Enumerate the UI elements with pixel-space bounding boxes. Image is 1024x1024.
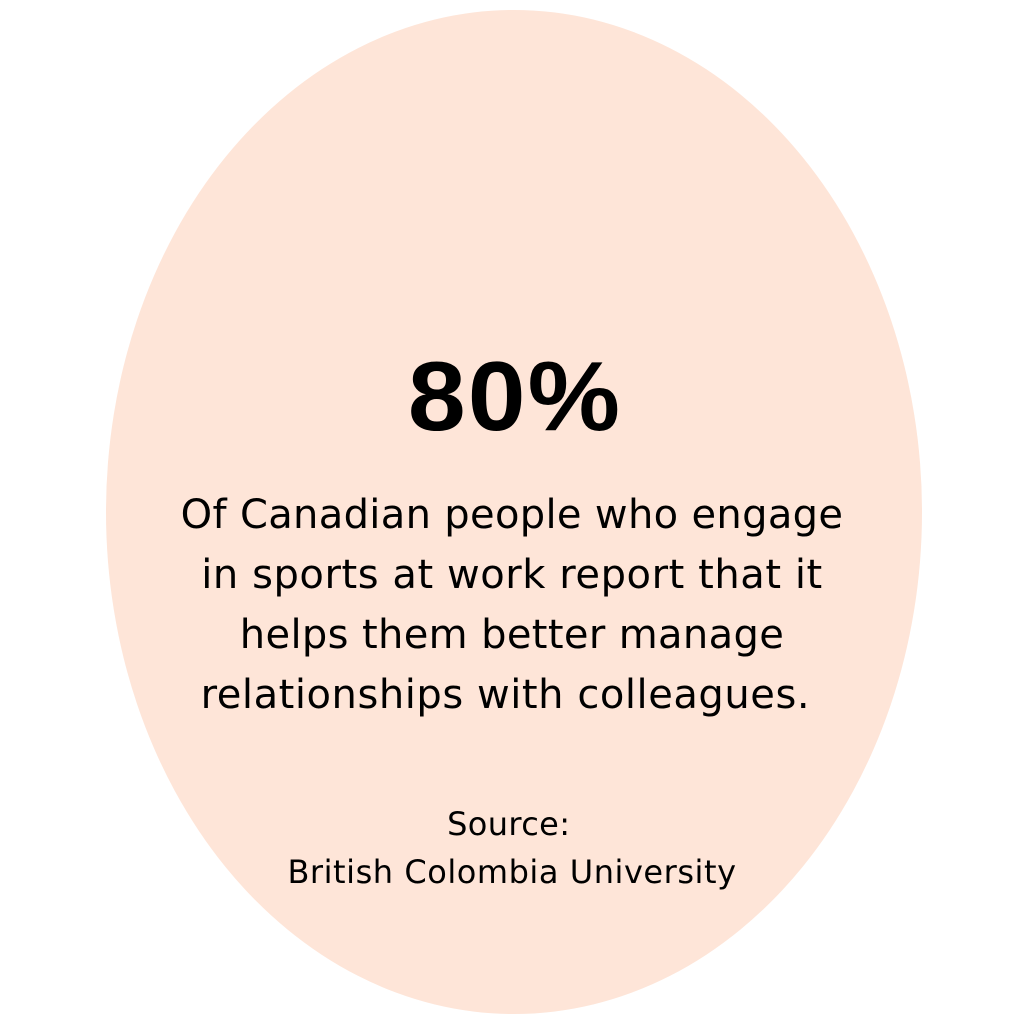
heading: 80%: 80% bbox=[407, 341, 622, 451]
text block: source: Source: bbox=[447, 805, 570, 843]
text block: source: British Colombia University bbox=[287, 853, 737, 891]
text block: description: relationships with colleagues. bbox=[201, 672, 810, 718]
panel: peach oval bbox=[106, 10, 922, 1014]
text block: description: helps them better manage bbox=[240, 612, 784, 658]
text block: description: Of Canadian people who engage bbox=[181, 492, 843, 538]
text block: source bbox=[287, 805, 737, 891]
text block: description: in sports at work report that it bbox=[201, 552, 823, 598]
text block: description bbox=[181, 492, 843, 718]
